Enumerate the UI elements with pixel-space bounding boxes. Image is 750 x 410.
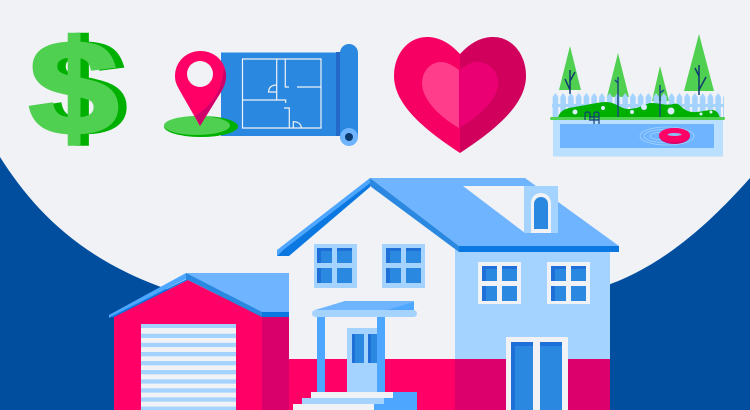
hedge — [558, 102, 720, 118]
pool float — [659, 128, 690, 144]
background: dark blue area below curve — [0, 157, 750, 410]
porch — [312, 301, 417, 392]
icon: blueprint — [221, 44, 358, 146]
upper left window — [314, 244, 357, 288]
ladder — [585, 112, 599, 124]
dormer — [524, 186, 558, 233]
grass strip — [550, 117, 725, 120]
water — [560, 124, 714, 148]
garage door — [141, 324, 236, 410]
pool basin — [553, 120, 723, 156]
main house wall — [289, 186, 610, 410]
front door — [347, 328, 377, 392]
icon: dollar sign: $ — [29, 14, 118, 163]
right window two — [547, 262, 590, 304]
icon: backyard pool — [550, 34, 725, 156]
double door — [506, 337, 568, 410]
trees — [559, 34, 714, 101]
right window one — [478, 262, 521, 304]
house illustration — [109, 178, 619, 410]
main roof — [277, 178, 619, 256]
fence — [552, 93, 724, 119]
ripples — [640, 127, 694, 145]
icon: dollar sign: $ — [37, 14, 127, 163]
icon: heart — [394, 37, 526, 153]
upper middle window — [382, 244, 425, 288]
tree trunks over hedge — [615, 77, 664, 119]
flowers — [572, 104, 712, 116]
front steps — [293, 392, 417, 410]
icon: location pin — [164, 51, 238, 137]
garage — [109, 273, 289, 410]
